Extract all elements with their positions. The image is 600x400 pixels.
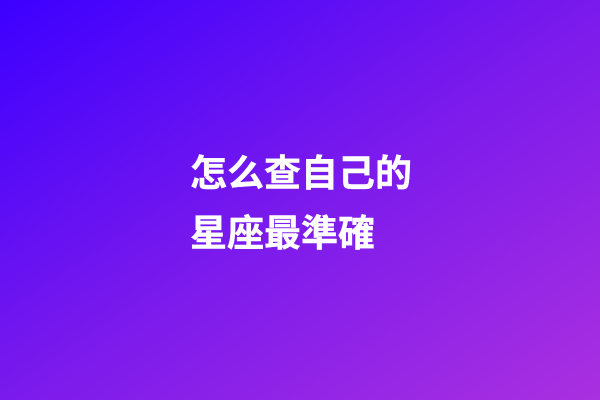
title: 星座最準確 [190,213,375,254]
title: 怎么查自己的 [190,153,412,194]
title [190,153,412,254]
